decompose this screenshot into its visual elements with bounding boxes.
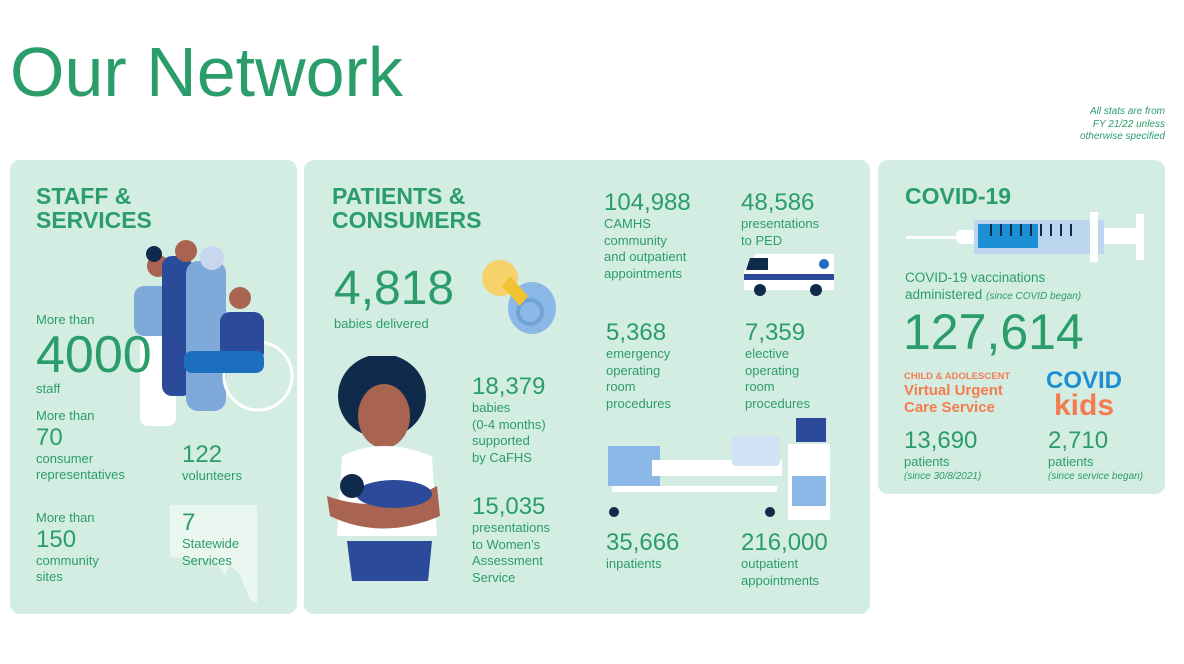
label: virtual urgent care: Virtual Urgent — [904, 382, 1003, 399]
logo: covid kids: COVID — [1046, 367, 1122, 394]
heading: STAFF & — [36, 183, 131, 209]
stat: 150 sites: community — [36, 552, 99, 568]
stat: inpatients: 35,666 — [606, 529, 679, 556]
stat: 70 consumer reps — [36, 408, 125, 482]
stat: 15,035: 15,035 — [472, 493, 545, 520]
heading — [332, 183, 482, 233]
title: Our Network — [10, 33, 403, 111]
stat: 122 volunteers: volunteers — [182, 468, 242, 483]
logo: covid kids — [1046, 367, 1122, 422]
stat: 15,035: Assessment — [472, 553, 543, 568]
stat: 4000 staff: More than — [36, 312, 95, 327]
stat: 13,690: (since 30/8/2021) — [904, 470, 981, 482]
stat: 4000 staff — [36, 312, 152, 396]
stat: 150 sites — [36, 510, 99, 584]
stat: 7 statewide — [182, 509, 239, 568]
stat: 2,710: patients — [1048, 454, 1094, 469]
stat: 48,586: 48,586 — [741, 189, 814, 216]
heading: COVID-19 — [905, 183, 1011, 209]
stat: babies delivered: 4,818 — [334, 262, 454, 315]
icon: syringe — [906, 212, 1144, 262]
text: vaccinations — [905, 270, 1081, 302]
stat: 7,359: elective — [745, 346, 789, 361]
note — [1080, 106, 1166, 142]
stat: 18,379: (0-4 months) — [472, 416, 546, 432]
note: otherwise specified — [1080, 131, 1165, 142]
heading: SERVICES — [36, 207, 152, 233]
stat: 150 sites: More than — [36, 510, 95, 525]
heading: CONSUMERS — [332, 207, 482, 233]
stat: 122 volunteers: 122 — [182, 441, 222, 468]
stat: 13,690: 13,690 — [904, 427, 977, 454]
stat: inpatients — [606, 529, 679, 571]
stat: 7,359: 7,359 — [745, 319, 805, 346]
stat: 5,368: 5,368 — [606, 319, 666, 346]
illustration: hospital bed and monitor — [608, 418, 830, 520]
stat: 15,035: Service — [472, 570, 515, 584]
stat: 48,586: presentations — [741, 216, 819, 231]
stat: babies delivered: babies delivered — [334, 316, 429, 331]
stat: 7 statewide: 7 — [182, 509, 195, 536]
stat: 15,035: presentations — [472, 520, 550, 535]
icon: dummy — [482, 260, 556, 334]
stat: 13,690: patients — [904, 454, 950, 469]
text: vaccinations: COVID-19 vaccinations — [905, 270, 1045, 285]
illustration: staff — [134, 240, 294, 426]
stat: 7,359: operating — [745, 362, 799, 378]
logo: covid kids: kids — [1054, 389, 1114, 422]
text: vaccinations: administered (since COVID began) — [905, 286, 1081, 302]
stat: 15,035 — [472, 493, 550, 584]
stat: 18,379: by CaFHS — [472, 450, 532, 464]
heading — [36, 183, 152, 233]
stat: 104,988: appointments — [604, 266, 682, 280]
stat: 15,035: to Women’s — [472, 536, 540, 552]
stat: 104,988 — [604, 189, 691, 280]
stat: 7 statewide: Statewide — [182, 536, 239, 551]
stat: 70 consumer reps: More than — [36, 408, 95, 423]
stat: outpatient: appointments — [741, 572, 819, 588]
panel: covid-19 — [878, 160, 1165, 494]
panel: staff & services — [10, 160, 297, 614]
stat: 2,710 — [1048, 427, 1143, 482]
label: virtual urgent care: CHILD & ADOLESCENT — [904, 371, 1010, 382]
heading: PATIENTS & — [332, 183, 465, 209]
stat: 70 consumer reps: consumer — [36, 450, 93, 466]
stat: 18,379: babies — [472, 400, 510, 415]
stat: 5,368: room — [606, 379, 636, 394]
stat: 150 sites: sites — [36, 569, 63, 584]
stat: 4000 staff: staff — [36, 380, 60, 396]
stat: 104,988: community — [604, 232, 667, 248]
note: All stats are from — [1090, 106, 1165, 117]
stat: 7 statewide: Services — [182, 552, 232, 568]
stat: outpatient — [741, 529, 828, 588]
icon: ambulance — [744, 254, 834, 296]
stat: 4000 staff: 4000 — [36, 326, 152, 384]
illustration: mother — [327, 356, 440, 581]
stat: 5,368: emergency — [606, 346, 670, 361]
stat: 7,359 — [745, 319, 810, 410]
stat: 104,988: 104,988 — [604, 189, 691, 216]
stat: 18,379: 18,379 — [472, 373, 545, 400]
stat: outpatient: 216,000 — [741, 529, 828, 556]
stat: 5,368 — [606, 319, 671, 410]
stat: 127,614: 127,614 — [903, 304, 1084, 360]
icon: SA map — [170, 505, 257, 603]
stat: 18,379 — [472, 373, 546, 464]
stat: 48,586 — [741, 189, 819, 248]
stat: 70 consumer reps: 70 — [36, 424, 63, 450]
stat: 5,368: operating — [606, 362, 660, 378]
stat: 2,710: 2,710 — [1048, 427, 1108, 454]
stat: 7,359: procedures — [745, 396, 810, 410]
stat: 18,379: supported — [472, 433, 530, 448]
note: FY 21/22 unless — [1093, 118, 1165, 130]
stat: 104,988: CAMHS — [604, 216, 651, 231]
stat: 122 volunteers — [182, 441, 242, 483]
stat: 70 consumer reps: representatives — [36, 467, 125, 482]
stat: 150 sites: 150 — [36, 526, 76, 552]
stat: 5,368: procedures — [606, 396, 671, 410]
stat: 2,710: (since service began) — [1048, 470, 1143, 482]
stat: 104,988: and outpatient — [604, 249, 686, 264]
label: virtual urgent care: Care Service — [904, 399, 995, 416]
stat: inpatients: inpatients — [606, 556, 662, 571]
stat: 48,586: to PED — [741, 232, 782, 248]
label: virtual urgent care — [904, 371, 1010, 416]
panel: patients & consumers — [304, 160, 870, 614]
stat: outpatient: outpatient — [741, 556, 798, 571]
stat: 7,359: room — [745, 379, 775, 394]
stat: 13,690 — [904, 427, 981, 482]
